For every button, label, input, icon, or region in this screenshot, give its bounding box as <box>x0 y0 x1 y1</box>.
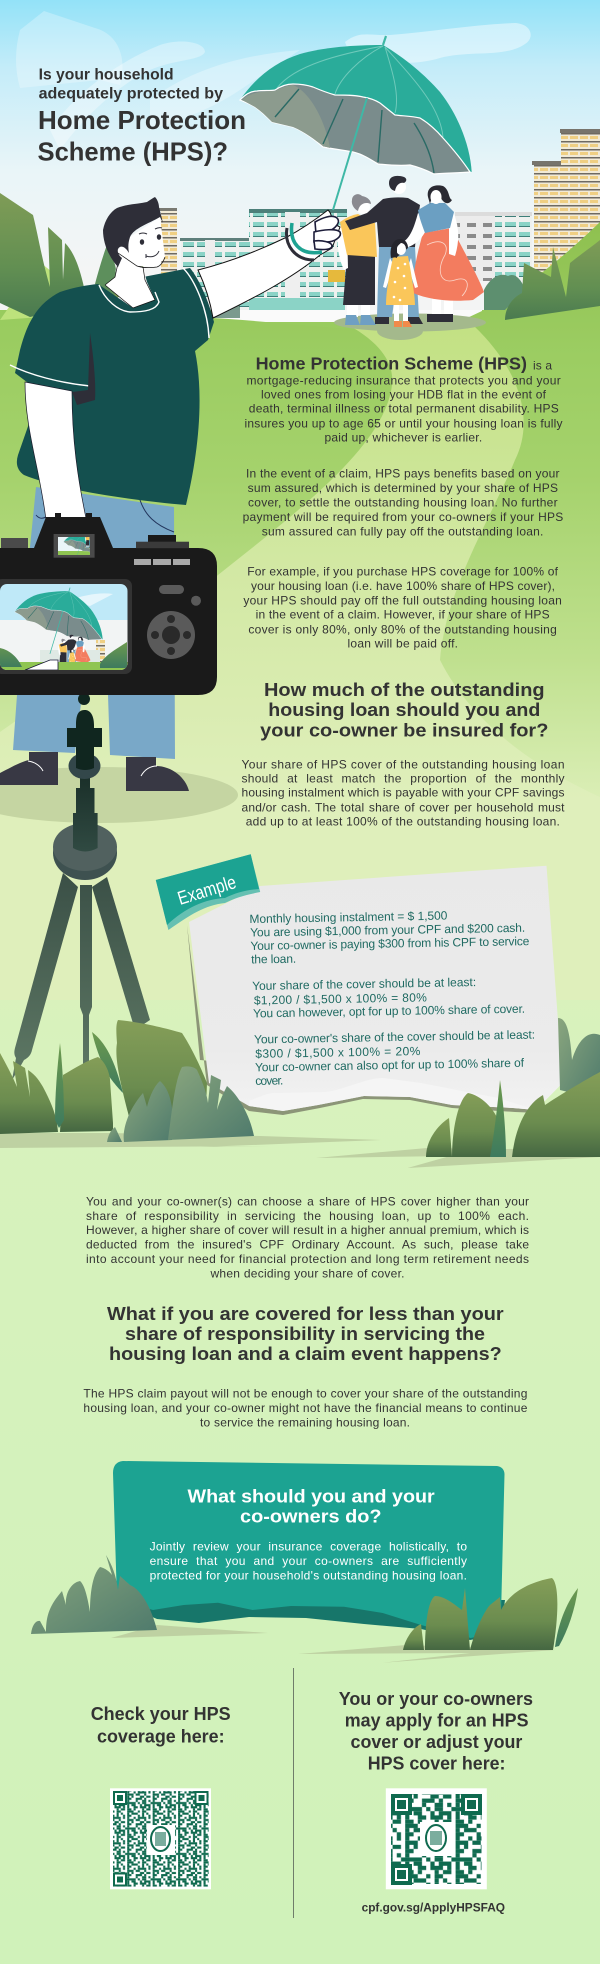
column <box>73 775 98 852</box>
child <box>383 239 418 327</box>
viewfinder <box>54 534 95 558</box>
paragraph: what HPS is: death, terminal illness or total permanent disability. HPS <box>249 402 559 416</box>
bush: panel left <box>31 1555 157 1634</box>
example text: Your co-owner is paying $300 from his CPF to service <box>250 934 530 953</box>
base disc <box>53 826 117 880</box>
paragraph: example of coverage <box>243 565 562 651</box>
panel: what should you do <box>113 1461 505 1640</box>
bushes: lower centre <box>107 1066 254 1142</box>
panel text <box>150 1540 467 1583</box>
paragraph: example of coverage: For example, if you purchase HPS coverage for 100% of <box>247 565 559 579</box>
panel heading: What should you and your <box>188 1487 435 1507</box>
face outline <box>105 253 165 308</box>
example text: the loan. <box>251 952 296 966</box>
neck shadow <box>130 262 145 280</box>
paragraph: what HPS is: insures you up to age 65 or until your housing loan is fully <box>244 416 562 430</box>
underside <box>240 84 470 174</box>
paragraph: higher share: However, a higher share of cover will result in a higher annual premium, which is <box>86 1223 529 1237</box>
panel heading <box>188 1487 435 1527</box>
hair <box>103 197 163 267</box>
paragraph: claim: payment will be required from your co-owners if your HPS <box>243 510 563 524</box>
example tag <box>156 854 260 930</box>
ground shadows: panel bushes <box>111 1625 555 1663</box>
grandmother <box>338 194 377 325</box>
father <box>345 176 423 324</box>
raised arm <box>198 210 340 318</box>
tripod <box>12 693 150 1085</box>
paragraph: your share: housing instalment which is payable with your CPF savings <box>242 786 564 800</box>
paragraph: higher share: share of responsibility in servicing the housing loan, up to 100% each. <box>86 1209 529 1223</box>
heading: what if: share of responsibility in servicing the <box>125 1324 485 1344</box>
main title: Scheme (HPS)? <box>38 136 228 166</box>
paragraph: claim payout: The HPS claim payout will not be enough to cover your share of the outstanding <box>83 1386 527 1400</box>
heading: apply or adjust: cover or adjust your <box>350 1732 522 1752</box>
hills <box>0 222 600 345</box>
canopy seams <box>277 46 443 137</box>
shirt <box>15 268 214 505</box>
example text: $300 / $1,500 x 100% = 20% <box>255 1044 421 1061</box>
paragraph: your share <box>242 757 565 829</box>
left arm <box>25 382 86 520</box>
top controls <box>148 535 176 542</box>
panel text: ensure that you and your co-owners are sufficiently <box>150 1554 467 1568</box>
ground shadow <box>334 314 486 340</box>
paragraph: higher share: when deciding your share of cover. <box>210 1267 404 1281</box>
paragraph: your share: add up to at least 100% of the outstanding housing loan. <box>246 815 560 829</box>
tripod head <box>67 693 102 770</box>
lit underside <box>242 85 330 148</box>
paragraph: claim: In the event of a claim, HPS pays benefits based on your <box>246 467 560 481</box>
buildings <box>158 129 600 322</box>
example text: Your share of the cover should be at least: <box>252 975 476 993</box>
paragraph: what HPS is: mortgage-reducing insurance that protects you and your <box>246 373 561 387</box>
example text <box>249 907 536 1088</box>
example text: Monthly housing instalment = $ 1,500 <box>249 909 448 926</box>
divider <box>292 1668 294 1918</box>
paragraph: higher share: deducted from the insured's CPF Ordinary Account. As such, please take <box>86 1238 529 1252</box>
grey buttons <box>134 559 190 565</box>
bush: panel right <box>403 1578 578 1650</box>
paragraph: claim payout: to service the remaining housing loan. <box>200 1416 410 1430</box>
camera body <box>0 517 217 695</box>
eyes and smile <box>139 228 162 258</box>
canopy <box>240 45 472 172</box>
url: cpf.gov.sg/ApplyHPSFAQ <box>362 1901 505 1915</box>
heading: apply or adjust: may apply for an HPS <box>345 1710 528 1730</box>
panel text: Jointly review your insurance coverage holistically, to <box>150 1540 467 1554</box>
paragraph: your share: and/or cash. The total share of cover per household must <box>242 800 565 814</box>
example tag: Example <box>175 872 239 910</box>
paragraph: your share: Your share of HPS cover of the outstanding housing loan <box>242 757 564 771</box>
heading: how much: How much of the outstanding <box>264 680 545 700</box>
paragraph: claim <box>243 467 563 538</box>
dial <box>1 538 28 548</box>
main title: adequately protected by <box>39 85 223 102</box>
paragraph: claim: sum assured can fully pay off the outstanding loan. <box>262 524 543 538</box>
heading: what if: What if you are covered for less than your <box>107 1304 504 1324</box>
control dial <box>147 611 195 659</box>
photographer <box>0 197 340 791</box>
hand <box>314 216 340 250</box>
heading: how much: housing loan should you and <box>268 700 540 720</box>
ground shadow: photographer <box>0 767 238 823</box>
screen <box>0 579 132 674</box>
paragraph: what HPS is: loved ones from losing your HDB flat in the event of <box>261 388 547 402</box>
heading: what if <box>107 1304 504 1364</box>
paragraph: example of coverage: in the event of a claim. However, if your share of HPS <box>256 608 550 622</box>
shirt trim <box>10 268 209 386</box>
paragraph: your share: should at least match the proportion of the monthly <box>242 771 564 785</box>
paragraph: example of coverage: loan will be paid off. <box>348 637 458 651</box>
torn edge <box>113 1600 505 1640</box>
example paper <box>187 866 563 1115</box>
paragraph: higher share: You and your co-owner(s) can choose a share of HPS cover higher than your <box>86 1195 529 1209</box>
clouds <box>16 11 531 150</box>
handle <box>333 98 367 210</box>
paper sheet <box>189 866 563 1111</box>
paragraph: claim: sum assured, which is determined by your share of HPS <box>248 481 558 495</box>
heading: how much <box>260 680 548 740</box>
heading: apply or adjust: HPS cover here: <box>368 1753 506 1773</box>
paragraph: example of coverage: cover is only 80%, only 80% of the outstanding housing <box>248 622 557 636</box>
example text: cover. <box>255 1073 283 1088</box>
collar <box>68 753 100 779</box>
paragraph: higher share: into account your need for financial protection and long term retirement needs <box>86 1252 529 1266</box>
bracelet <box>287 223 322 260</box>
ribs <box>275 89 434 173</box>
heading: what if: housing loan and a claim event happens? <box>109 1344 502 1364</box>
example text: You can however, opt for up to 100% share of cover. <box>253 1002 525 1020</box>
pill and dot <box>159 585 201 606</box>
panel heading: co-owners do? <box>240 1507 382 1527</box>
hero background bushes <box>0 193 600 320</box>
bushes: lower right <box>426 1018 600 1157</box>
main title: Home Protection <box>38 105 246 135</box>
paragraph: claim: cover, to settle the outstanding housing loan. No further <box>248 495 558 509</box>
tripod legs <box>12 873 150 1085</box>
QR code: left <box>110 1788 211 1889</box>
paragraph: claim payout <box>83 1386 528 1430</box>
example text: $1,200 / $1,500 x 100% = 80% <box>254 990 427 1007</box>
heading: apply or adjust: You or your co-owners <box>339 1689 533 1709</box>
main title <box>38 66 246 166</box>
umbrella <box>240 36 472 210</box>
face fill <box>105 217 165 308</box>
heading: how much: your co-owner be insured for? <box>260 720 548 740</box>
example text: Your co-owner can also opt for up to 100% share of <box>255 1056 525 1074</box>
example text: Your co-owner's share of the cover should be at least: <box>254 1028 535 1046</box>
paper shadow <box>187 925 540 1115</box>
heading: apply or adjust <box>339 1689 533 1773</box>
paragraph: what HPS is: is a <box>533 358 552 372</box>
paragraph: example of coverage: your housing loan (i.e. have 100% share of HPS cover), <box>251 579 555 593</box>
legs <box>13 487 175 759</box>
main title: Is your household <box>39 66 174 83</box>
panel text: protected for your household's outstanding housing loan. <box>150 1569 467 1583</box>
paragraph: what HPS is: paid up, whichever is earlier. <box>324 431 482 445</box>
heading: check coverage: Check your HPS <box>91 1704 231 1724</box>
ground shadows: lower foreground <box>0 1133 600 1168</box>
paragraph: example of coverage: your HPS should pay off the full outstanding housing loan <box>243 593 562 607</box>
QR code: right <box>386 1788 487 1889</box>
shoes <box>0 752 189 791</box>
winding path <box>0 326 600 1000</box>
panel body <box>113 1461 504 1638</box>
paragraph: what HPS is <box>244 353 562 445</box>
camera <box>0 513 217 695</box>
paragraph: higher share <box>86 1195 529 1281</box>
heading: check coverage: coverage here: <box>97 1726 225 1746</box>
paragraph: what HPS is: Home Protection Scheme (HPS) <box>256 353 527 373</box>
family under umbrella <box>334 176 486 340</box>
example text: You are using $1,000 from your CPF and $200 cash. <box>250 921 525 939</box>
paragraph: claim payout: housing loan, and your co-owner might not have the financial means to continue <box>83 1401 528 1415</box>
mother <box>403 185 484 322</box>
bushes: lower left <box>0 1020 207 1134</box>
heading: check coverage <box>91 1704 231 1746</box>
